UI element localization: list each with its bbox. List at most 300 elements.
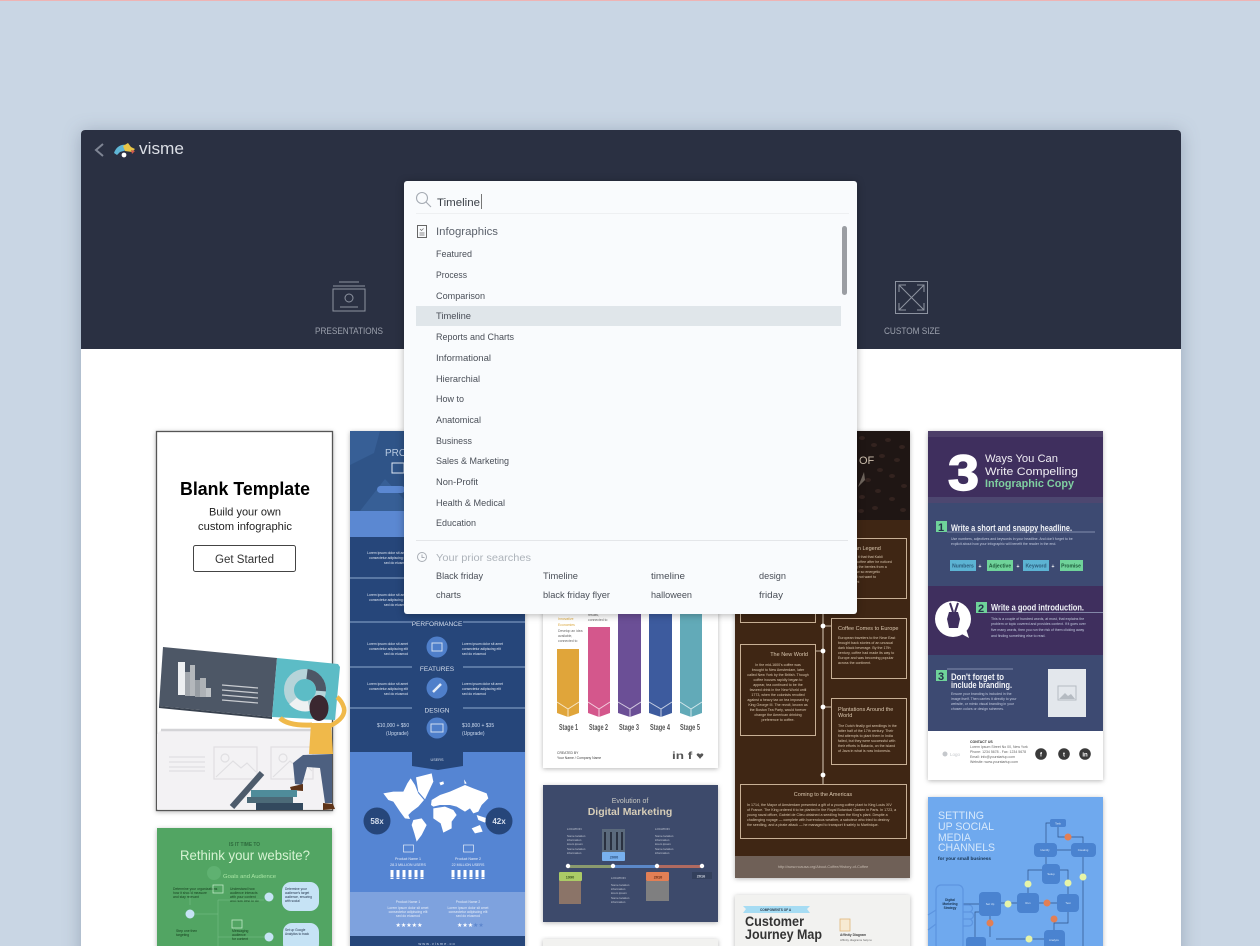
icon: custom size xyxy=(896,282,928,314)
box: the new world: The New World xyxy=(770,652,808,658)
users map section xyxy=(350,752,525,892)
formula tags: + xyxy=(979,564,982,570)
timeline captions: information xyxy=(567,838,582,842)
lorem rows: sed do eiusmod xyxy=(384,561,408,565)
header image xyxy=(350,431,525,511)
pricing: (Upgrade) xyxy=(462,731,485,737)
flow diagram: Identify xyxy=(1040,848,1050,852)
flow diagram: Test xyxy=(1065,901,1071,905)
button: get started xyxy=(194,546,296,572)
coffee photo header xyxy=(735,431,910,520)
box: coming to the americas: challenging voyage — complete with horrendous weather, a saboteur who tried to destroy xyxy=(747,818,890,822)
blue band xyxy=(350,511,525,537)
list: infographic categories: Informational xyxy=(436,353,491,364)
timeline images and tags: 2016 xyxy=(697,874,705,878)
section 2: problem or topic covered and provides context. If it goes over xyxy=(991,622,1087,626)
product labels: Product Name 2 xyxy=(455,857,481,861)
timeline captions: Some location xyxy=(567,834,586,838)
card: customer journey map: Journey Map xyxy=(745,926,822,942)
small stage notes xyxy=(558,613,608,643)
heading xyxy=(938,810,995,861)
section 1: 1 xyxy=(938,522,944,534)
product labels: 28.3 MILLION USERS xyxy=(390,863,426,867)
lorem rows: sed do eiusmod xyxy=(384,692,408,696)
search input xyxy=(416,192,482,209)
feature icons xyxy=(426,636,448,738)
section 2: and finding something else to read. xyxy=(991,634,1046,638)
box: coffee comes to europe: European travelers to the Near East xyxy=(838,636,895,640)
prior searches: black friday flyer xyxy=(543,590,610,601)
box: coming to the americas: Coming to the Americas xyxy=(794,792,852,798)
ratings section: consectetur adipiscing elit xyxy=(449,910,487,914)
text: subtitle: Build your own xyxy=(209,506,281,518)
box: coming to the americas: young naval officer, Gabriel de Clieu obtained a seedling from the King's plant. Despite a xyxy=(747,813,888,817)
box: the new world: coffee houses rapidly began to xyxy=(754,678,802,682)
heading section: Infographic Copy xyxy=(985,478,1075,490)
box: ethiopian legend: discovered coffee after he noticed xyxy=(838,560,892,564)
flow diagram: Task xyxy=(1055,822,1061,826)
flow diagram: targeting xyxy=(176,933,189,937)
ratings section: ★★ xyxy=(473,922,484,929)
timeline captions: Some location xyxy=(611,883,630,887)
label: presentations: PRESENTATIONS xyxy=(315,326,383,336)
coffee footer xyxy=(735,856,910,878)
stage labels: Stage 5 xyxy=(680,723,700,732)
box: coming to the americas: In 1714, the Mayor of Amsterdam presented a gift of a young coffee plant to King Louis XIV xyxy=(747,803,892,807)
lorem rows: consectetur adipiscing elit xyxy=(369,598,408,602)
list: infographic categories xyxy=(436,249,514,529)
stat: 58x xyxy=(364,808,390,834)
coffee photo header: OF xyxy=(859,455,875,467)
app header bar xyxy=(81,130,1181,349)
box: the new world: called New York by the British. Though xyxy=(747,673,809,677)
box: the new world xyxy=(740,644,816,736)
stat: 42x: 42x xyxy=(492,817,506,826)
footer: CONTACT US xyxy=(970,740,993,744)
footer: in xyxy=(1082,752,1088,758)
credit xyxy=(557,751,601,760)
box: coffee comes to europe: Coffee Comes to Europe xyxy=(838,626,898,632)
timeline captions: lorem ipsum xyxy=(567,842,583,846)
small stage notes: Develop an idea xyxy=(558,629,583,633)
timeline captions: lorem ipsum xyxy=(611,891,627,895)
box: the new world: appear, tea continued to be the xyxy=(753,683,803,687)
formula tags: + xyxy=(1052,564,1055,570)
formula tags: Keyword xyxy=(1025,564,1047,570)
text: subtitle xyxy=(198,506,293,533)
lorem rows: consectetur adipiscing elit xyxy=(369,556,408,560)
box: plantations around the world: first attempts to plant them in India xyxy=(838,734,893,738)
box: ethiopian legend: tree. He grew so energetic xyxy=(838,570,880,574)
footer: Email: info@yourstartup.com xyxy=(970,755,1015,759)
box: coffee comes to europe: dark black beverage. By the 17th xyxy=(838,646,891,650)
lorem rows xyxy=(367,551,408,696)
lorem rows right: consectetur adipiscing elit xyxy=(462,687,501,691)
small stage notes: connected to xyxy=(558,639,578,643)
section 3: Ensure your branding is included in the xyxy=(951,692,1012,696)
stage labels: Stage 1 xyxy=(559,723,578,732)
card: customer journey map: Affinity diagrams help to xyxy=(840,938,872,942)
card: customer journey map: Affinity Diagram xyxy=(840,933,866,937)
lorem rows right: sed do eiusmod xyxy=(462,692,486,696)
lorem rows: Lorem ipsum dolor sit amet xyxy=(367,551,408,555)
heading: rethink: IS IT TIME TO xyxy=(229,842,261,848)
card: customer journey map: COMPONENTS OF A xyxy=(760,908,792,912)
formula tags: Adjective xyxy=(989,564,1011,570)
panel: search dropdown xyxy=(404,181,857,614)
row dividers xyxy=(350,578,525,708)
box: coming to the americas: of France. The King ordered it to be planted in the Royal Botanical Garden in Paris. In 1723, a xyxy=(747,808,896,812)
section labels xyxy=(412,621,463,714)
list: infographic categories: How to xyxy=(436,394,464,405)
box: plantations around the world: The Dutch finally got seedlings in the xyxy=(838,724,897,728)
formula tags: + xyxy=(1017,564,1020,570)
small stage notes: results, xyxy=(588,613,599,617)
pricing: $10,800 + $35 xyxy=(462,723,494,729)
coffee footer: http://www.ncausa.org/About-Coffee/History-of-Coffee xyxy=(778,865,868,869)
lorem rows right: Lorem ipsum dolor sit amet xyxy=(462,642,503,646)
timeline captions: information xyxy=(655,838,670,842)
section 1: explicit about how your infographic will benefit the reader in the end. xyxy=(951,542,1056,546)
credit: CREATED BY xyxy=(557,751,579,755)
heading section xyxy=(928,431,1103,503)
top accent line xyxy=(0,0,1260,1)
timeline captions: Some location xyxy=(655,834,674,838)
timeline captions: information xyxy=(567,851,582,855)
stage labels: Stage 4 xyxy=(650,723,670,732)
flow diagram: Goals and Audience xyxy=(223,874,276,880)
section 3 xyxy=(928,655,1103,731)
prior searches xyxy=(416,540,848,601)
pricing: (Upgrade) xyxy=(386,731,409,737)
box: the new world: against a heavy tax on tea imposed by xyxy=(747,698,809,702)
lorem rows: Lorem ipsum dolor sit amet xyxy=(367,593,408,597)
prior searches: timeline xyxy=(651,571,685,582)
small stage notes: Economies xyxy=(558,623,575,627)
footer url: www.visme.co xyxy=(418,941,456,946)
flow diagram: audience xyxy=(232,933,246,937)
timeline captions: information xyxy=(611,887,626,891)
card: customer journey map xyxy=(735,895,910,946)
ratings section: Product Name 1 xyxy=(396,900,420,904)
pricing xyxy=(377,723,494,737)
ratings section: sed do eiusmod xyxy=(396,914,420,918)
card: rethink your website xyxy=(157,828,332,946)
list: infographic categories: Process xyxy=(436,270,467,281)
lorem rows: consectetur adipiscing elit xyxy=(369,687,408,691)
world map xyxy=(383,773,488,842)
flow diagram: for content xyxy=(232,937,248,941)
small stage notes: Innovative xyxy=(558,617,574,621)
flow diagram: Step one then xyxy=(176,929,197,933)
list: infographic categories: Comparison xyxy=(436,291,485,302)
timeline images and tags: 1990 xyxy=(566,876,574,880)
section labels: FEATURES xyxy=(420,666,455,673)
box: hidden left entry xyxy=(740,590,816,622)
list: infographic categories: Sales & Marketing xyxy=(436,456,509,467)
timeline captions: Some location xyxy=(567,847,586,851)
flow diagram: Messaging xyxy=(232,929,249,933)
stat: 42x xyxy=(486,808,512,834)
box: the new world: favored drink in the New World until xyxy=(750,688,807,692)
button: get started: Get Started xyxy=(215,554,274,566)
list: infographic categories: Education xyxy=(436,518,476,529)
card: social media flowchart xyxy=(928,797,1103,946)
box: the new world: brought to New Amsterdam, later xyxy=(752,668,805,672)
ratings section: Lorem ipsum dolor sit amet xyxy=(388,906,428,910)
lorem rows: sed do eiusmod xyxy=(384,603,408,607)
text: subtitle: custom infographic xyxy=(198,521,293,533)
list: infographic categories: Non-Profit xyxy=(436,477,478,488)
list: infographic categories: Timeline xyxy=(436,311,471,322)
prior searches: design xyxy=(759,571,786,582)
section 2: Write a good introduction. xyxy=(991,602,1084,612)
flow diagram xyxy=(173,866,319,946)
flow diagram: Setup xyxy=(1047,872,1055,876)
box: plantations around the world: of Java in what is now Indonesia. xyxy=(838,749,891,753)
stage labels: Stage 2 xyxy=(589,723,608,732)
stage labels: Stage 3 xyxy=(619,723,639,732)
formula tags xyxy=(950,560,1083,571)
section labels: PERFORMANCE xyxy=(412,621,463,628)
box: coffee comes to europe: brought back stories of an unusual xyxy=(838,641,893,645)
card: 3 ways to write copy xyxy=(928,431,1103,780)
lorem rows right: sed do eiusmod xyxy=(462,652,486,656)
flow diagram: Analytics to track xyxy=(285,932,309,936)
box: coming to the americas: the seedling, and a pirate attack — he managed to transport it safely to Martinique. xyxy=(747,823,879,827)
box: the new world: change the American drinking xyxy=(754,713,802,717)
ratings section: Lorem ipsum dolor sit amet xyxy=(448,906,488,910)
ratings section: ★★★ xyxy=(457,922,473,929)
list: infographic categories: Reports and Charts xyxy=(436,332,514,343)
flow diagram: audience's target xyxy=(285,891,309,895)
card: digital marketing timeline xyxy=(543,785,718,922)
card: stage bars xyxy=(543,600,718,768)
timeline captions xyxy=(567,827,674,904)
heading: MEDIA xyxy=(938,832,972,844)
section 1: Write a short and snappy headline. xyxy=(951,523,1072,533)
box: the new world: preference to coffee. xyxy=(762,718,794,722)
logo: visme xyxy=(114,140,184,158)
heading xyxy=(588,798,672,818)
section 2 xyxy=(928,586,1103,655)
social icons: in f ♥ xyxy=(672,751,704,762)
icon: presentations xyxy=(333,282,365,311)
list: infographic categories: Health & Medical xyxy=(436,498,505,509)
heading section: Ways You Can xyxy=(985,453,1058,465)
timeline images and tags: 2000 xyxy=(610,856,618,860)
box: coffee comes to europe: century, coffee had made its way to xyxy=(838,651,894,655)
section 3: 3 xyxy=(938,671,944,683)
heading: CHANNELS xyxy=(938,842,995,854)
lorem rows: Lorem ipsum dolor sit amet xyxy=(367,682,408,686)
heading: SETTING xyxy=(938,810,984,822)
prior searches: Timeline xyxy=(543,571,578,582)
product labels xyxy=(390,845,485,867)
timeline captions: LOCATION xyxy=(655,827,670,831)
heading: UP SOCIAL xyxy=(938,821,994,833)
timeline captions: information xyxy=(611,900,626,904)
category heading: infographics xyxy=(416,214,849,238)
heading section: Write Compelling xyxy=(985,466,1078,478)
box: plantations around the world: failed, but they were successful with xyxy=(838,739,895,743)
phone illustration xyxy=(928,885,974,946)
flow diagram: audience, ensuring xyxy=(285,895,312,899)
footer xyxy=(942,740,1091,764)
heading: rethink: Rethink your website? xyxy=(180,847,310,863)
box: plantations around the world: latter half of the 17th century. Their xyxy=(838,729,894,733)
lorem rows: consectetur adipiscing elit xyxy=(369,647,408,651)
list: infographic categories: Business xyxy=(436,436,472,447)
prior searches: Black friday xyxy=(436,571,483,582)
product labels: 22 MILLION USERS xyxy=(452,863,485,867)
box: the new world: 1773, when the colonists revolted xyxy=(751,693,805,697)
box: the new world: King George III. The revolt, known as xyxy=(748,703,808,707)
illustration: person lifting a slide xyxy=(157,647,344,810)
box: ethiopian legend: Legend has it that that Kaldi xyxy=(838,555,883,559)
credit: Your Name / Company Name xyxy=(557,756,601,760)
section 3: Don't forget to xyxy=(951,672,1004,682)
flow diagram: and how best to do xyxy=(230,899,259,903)
timeline spine xyxy=(815,612,831,784)
users map section: USERS xyxy=(430,758,444,762)
flow diagram xyxy=(928,819,1096,946)
flow diagram: Determine your xyxy=(285,887,308,891)
prior searches: charts xyxy=(436,590,461,601)
footer: t xyxy=(1063,752,1065,758)
flow diagram: with social xyxy=(285,899,300,903)
prior searches: friday xyxy=(759,590,783,601)
timeline captions: LOCATION xyxy=(611,876,626,880)
card: product comparison xyxy=(350,431,525,946)
ratings section xyxy=(350,892,525,936)
label: custom size: CUSTOM SIZE xyxy=(884,326,940,336)
heading: Digital Marketing xyxy=(588,806,672,818)
scrollbar xyxy=(842,226,847,295)
footer: Lorem Ipsum Street No 00, New York xyxy=(970,745,1028,749)
lorem rows: sed do eiusmod xyxy=(384,652,408,656)
small stage notes: available, xyxy=(558,634,572,638)
flow diagram: Determine your organizations xyxy=(173,887,218,891)
timeline captions: Some location xyxy=(611,896,630,900)
section 1: Use numbers, adjectives and keywords in your headline. And don't forget to be xyxy=(951,537,1073,541)
box: plantations around the world: their efforts in Batavia, on the island xyxy=(838,744,895,748)
section 1 xyxy=(928,503,1103,586)
category heading: infographics: Infographics xyxy=(436,226,499,238)
box: plantations around the world xyxy=(832,698,906,764)
flow diagram: Digital xyxy=(945,898,955,902)
flow diagram: with your content xyxy=(230,895,256,899)
box: the new world: the Boston Tea Party, would forever xyxy=(750,708,807,712)
card: partially visible template xyxy=(543,939,718,946)
box: plantations around the world: World xyxy=(838,713,852,719)
panel: app window xyxy=(81,130,1181,946)
card: blank template xyxy=(156,432,344,810)
flow diagram: Understand how xyxy=(230,887,255,891)
header image: PRO xyxy=(385,448,407,459)
stage labels xyxy=(559,723,700,732)
section labels: DESIGN xyxy=(425,708,450,714)
lorem rows: Lorem ipsum dolor sit amet xyxy=(367,642,408,646)
footer: Phone: 1234 5678 - Fax: 1234 5678 xyxy=(970,750,1026,754)
prior searches: halloween xyxy=(651,590,692,601)
heading: blank template: Blank Template xyxy=(180,479,310,499)
box: ethiopian legend: sleep at night xyxy=(838,580,859,584)
lorem rows right: consectetur adipiscing elit xyxy=(462,647,501,651)
section 2: five many words, then you run the risk of them clicking away xyxy=(991,628,1084,632)
timeline captions: information xyxy=(655,851,670,855)
lorem rows right: Lorem ipsum dolor sit amet xyxy=(462,682,503,686)
section 3: include branding. xyxy=(951,680,1012,690)
formula tags: Numbers xyxy=(952,564,974,570)
box: ethiopian legend: that they did not want to xyxy=(838,575,876,579)
box: the new world: In the mid-1600's coffee was xyxy=(755,663,801,667)
flow diagram: Run xyxy=(1025,901,1031,905)
bar chart: stages xyxy=(557,600,702,717)
flow diagram: Marketing xyxy=(942,902,958,906)
flow diagram: Analyze xyxy=(1049,938,1059,942)
card: customer journey map: Customer xyxy=(745,913,804,929)
box: coming to the americas xyxy=(740,784,906,838)
heading: for your small business xyxy=(938,856,992,861)
icon: back chevron xyxy=(96,144,103,156)
flow diagram: Strategy xyxy=(944,906,957,910)
footer: Website: www.yourstartup.com xyxy=(970,760,1018,764)
list: infographic categories: Featured xyxy=(436,249,472,260)
footer: f xyxy=(1040,752,1043,758)
flow diagram: Set Up xyxy=(986,902,995,906)
logo: visme: visme xyxy=(139,140,184,158)
box: ethiopian legend xyxy=(832,538,906,598)
timeline captions: lorem ipsum xyxy=(655,842,671,846)
heading section: 3 xyxy=(948,445,979,501)
section 2: This is a couple of hundred words, at most, that explains the xyxy=(991,617,1084,621)
search input: Timeline xyxy=(437,197,480,209)
box: ethiopian legend: goats eating the berries from a xyxy=(838,565,887,569)
list: infographic categories: Hierarchial xyxy=(436,374,480,385)
box: ethiopian legend: Ethiopian Legend xyxy=(838,546,881,552)
flow diagram: and stay relevant xyxy=(173,895,199,899)
pricing: $10,000 + $50 xyxy=(377,723,409,729)
list: infographic categories: Anatomical xyxy=(436,415,481,426)
ratings section: consectetur adipiscing elit xyxy=(389,910,427,914)
small stage notes: connected to xyxy=(588,618,608,622)
timeline captions: Some location xyxy=(655,847,674,851)
flow diagram: audience interacts xyxy=(230,891,258,895)
timeline images and tags: 2010 xyxy=(654,876,662,880)
box: coffee comes to europe xyxy=(832,618,906,678)
section 3: website, or mimic visual branding in your xyxy=(951,702,1015,706)
selected row highlight xyxy=(416,306,841,326)
timeline xyxy=(566,864,704,868)
ratings section: ★★★★★ xyxy=(396,922,422,929)
prior searches: Your prior searches xyxy=(436,552,531,564)
people icons xyxy=(392,870,483,879)
timeline images and tags xyxy=(559,829,712,904)
flow diagram: Creating xyxy=(1078,848,1089,852)
heading: Evolution of xyxy=(612,798,648,805)
section 3: image itself. Then carries it directly to your xyxy=(951,697,1017,701)
lorem rows right xyxy=(462,642,503,696)
section 2: 2 xyxy=(978,603,984,615)
flow diagram: how it should measure xyxy=(173,891,207,895)
card: coffee history timeline xyxy=(735,431,910,878)
formula tags: Promise xyxy=(1061,564,1081,570)
ratings section: Product Name 2 xyxy=(456,900,480,904)
footer: Logo xyxy=(950,752,961,757)
box: coffee comes to europe: across the continent. xyxy=(838,661,871,665)
timeline captions: LOCATION xyxy=(567,827,582,831)
